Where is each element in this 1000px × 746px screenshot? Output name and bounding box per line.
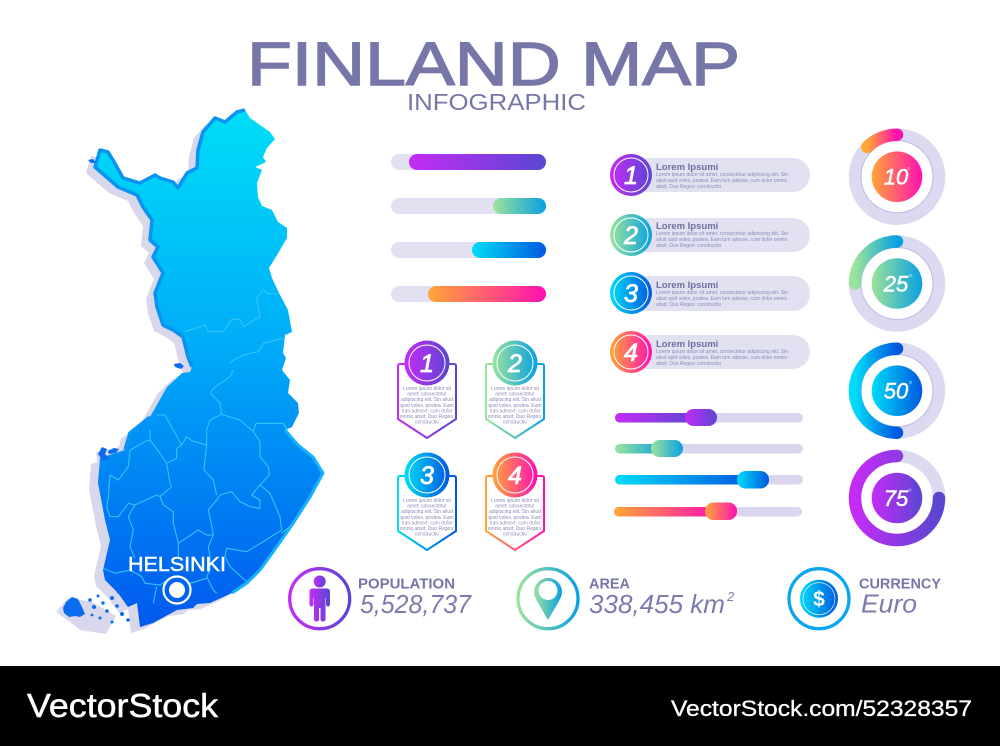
east coast outline [232,430,323,593]
badge 3: 3 [420,462,434,490]
badge 3 [398,452,456,550]
donut 10 [855,135,939,219]
list item 2: Lorem Ipsumi [656,221,718,232]
badge 4 [486,452,544,550]
badge 3: tum adesse, cum dolor [402,520,453,526]
islands [63,159,184,624]
icon: person [290,569,350,629]
area stat [518,569,735,629]
list item 2 [610,214,810,256]
donut 10: 10 [884,164,909,190]
badge 4: Lorem ipsum dolor sit [491,498,540,504]
badge 1: Lorem ipsum dolor sit [403,386,452,392]
badge 1: quid voles, postea. Eam [400,403,454,409]
list item 1: Lorem Ipsumi [656,162,718,173]
badge 1 [398,340,456,438]
badge 2: 2 [507,350,522,378]
badge 2: omnis absit; Duo Reges: [488,414,542,420]
donut 25: 25 [883,272,909,296]
top progress bars [391,154,546,302]
footer band: VectorStock [27,687,219,724]
list item 3: absit; Duo Reges: constructio [656,302,722,308]
list item 1: Lorem ipsum dolor sit amet, consectetur adipiscing elit. Sin [656,172,788,178]
badge 1: omnis absit; Duo Reges: [400,414,454,420]
area stat: 338,455 km [589,589,725,619]
currency stat [789,569,941,629]
badge 2: tum adesse, cum dolor [490,408,541,414]
badge 1: tum adesse, cum dolor [402,408,453,414]
list item 3: Lorem Ipsumi [656,280,718,291]
badge 3: constructio [415,532,439,538]
badge 3: quid voles, postea. Eam [400,515,454,521]
list item 3: Lorem ipsum dolor sit amet, consectetur adipiscing elit. Sin [656,290,788,296]
footer band [0,666,1000,746]
donut 25 [855,242,939,326]
southern region borders [103,370,292,603]
population stat: 5,528,737 [360,589,472,619]
badge 1: amet, consectetur [407,392,447,398]
list item 4: 4 [624,339,638,367]
Helsinki marker [164,576,190,604]
badge 2: Lorem ipsum dolor sit [491,386,540,392]
list item 2: aliud quid voles, postea. Eam tum adesse, cum dolor omnis [656,237,788,243]
list item 2: absit; Duo Reges: constructio [656,243,722,249]
list item 1 [610,154,810,196]
list item 3 [610,272,810,314]
list item 2: Lorem ipsum dolor sit amet, consectetur adipiscing elit. Sin [656,231,788,237]
west coast outline [95,110,245,450]
population stat: POPULATION [358,577,455,593]
map shadow [56,116,314,634]
list item 3: 3 [624,280,638,308]
donut 75: 75 [884,486,909,511]
badge 3: adipiscing elit. Sin aliud [401,509,453,515]
list item 1: 1 [624,162,638,190]
badge 3: omnis absit; Duo Reges: [400,526,454,532]
badge 4: 4 [508,462,522,490]
badge 2: quid voles, postea. Eam [488,403,542,409]
donut 75 [855,456,939,540]
badge 1: constructio [415,420,439,426]
donut 50: 50 [884,378,909,404]
population stat [290,569,472,629]
list item 1: aliud quid voles, postea. Eam tum adesse, cum dolor omnis [656,178,788,184]
badge 4: constructio [503,532,527,538]
list item 4: Lorem Ipsumi [656,339,718,350]
map of Finland [56,110,323,634]
list item 4: aliud quid voles, postea. Eam tum adesse, cum dolor omnis [656,355,788,361]
list item 1: absit; Duo Reges: constructio [656,184,722,190]
badge 3: Lorem ipsum dolor sit [403,498,452,504]
donut 50 [855,349,939,433]
badge 4: tum adesse, cum dolor [490,520,541,526]
currency stat: Euro [861,589,917,619]
northern region borders [185,289,283,363]
badge 2 [486,340,544,438]
list item 3: aliud quid voles, postea. Eam tum adesse, cum dolor omnis [656,296,788,302]
subtitle: INFOGRAPHIC [407,89,586,115]
badge 4: adipiscing elit. Sin aliud [489,509,541,515]
badge 4: amet, consectetur [495,504,535,510]
currency stat: CURRENCY [859,577,941,593]
footer band: VectorStock.com/52328357 [671,696,972,721]
map body [95,110,323,627]
badge 3: amet, consectetur [407,504,447,510]
badge 1: adipiscing elit. Sin aliud [401,397,453,403]
list item 4: absit; Duo Reges: constructio [656,361,722,367]
badge 2: adipiscing elit. Sin aliud [489,397,541,403]
icon: dollar coin [789,569,849,629]
badge 2: amet, consectetur [495,392,535,398]
list item 4 [610,331,810,373]
list item 2: 2 [623,222,638,250]
badge 2: constructio [503,420,527,426]
Helsinki label: HELSINKI [128,553,226,576]
badge 1: 1 [420,350,434,378]
list item 4: Lorem ipsum dolor sit amet, consectetur adipiscing elit. Sin [656,349,788,355]
sliders [614,409,803,520]
area stat: AREA [589,577,631,593]
icon: map pin [518,569,578,629]
title: FINLAND MAP [247,30,740,98]
badge 4: quid voles, postea. Eam [488,515,542,521]
badge 4: omnis absit; Duo Reges: [488,526,542,532]
area stat: 2 [726,589,735,604]
icon: dollar coin: $ [813,588,825,611]
